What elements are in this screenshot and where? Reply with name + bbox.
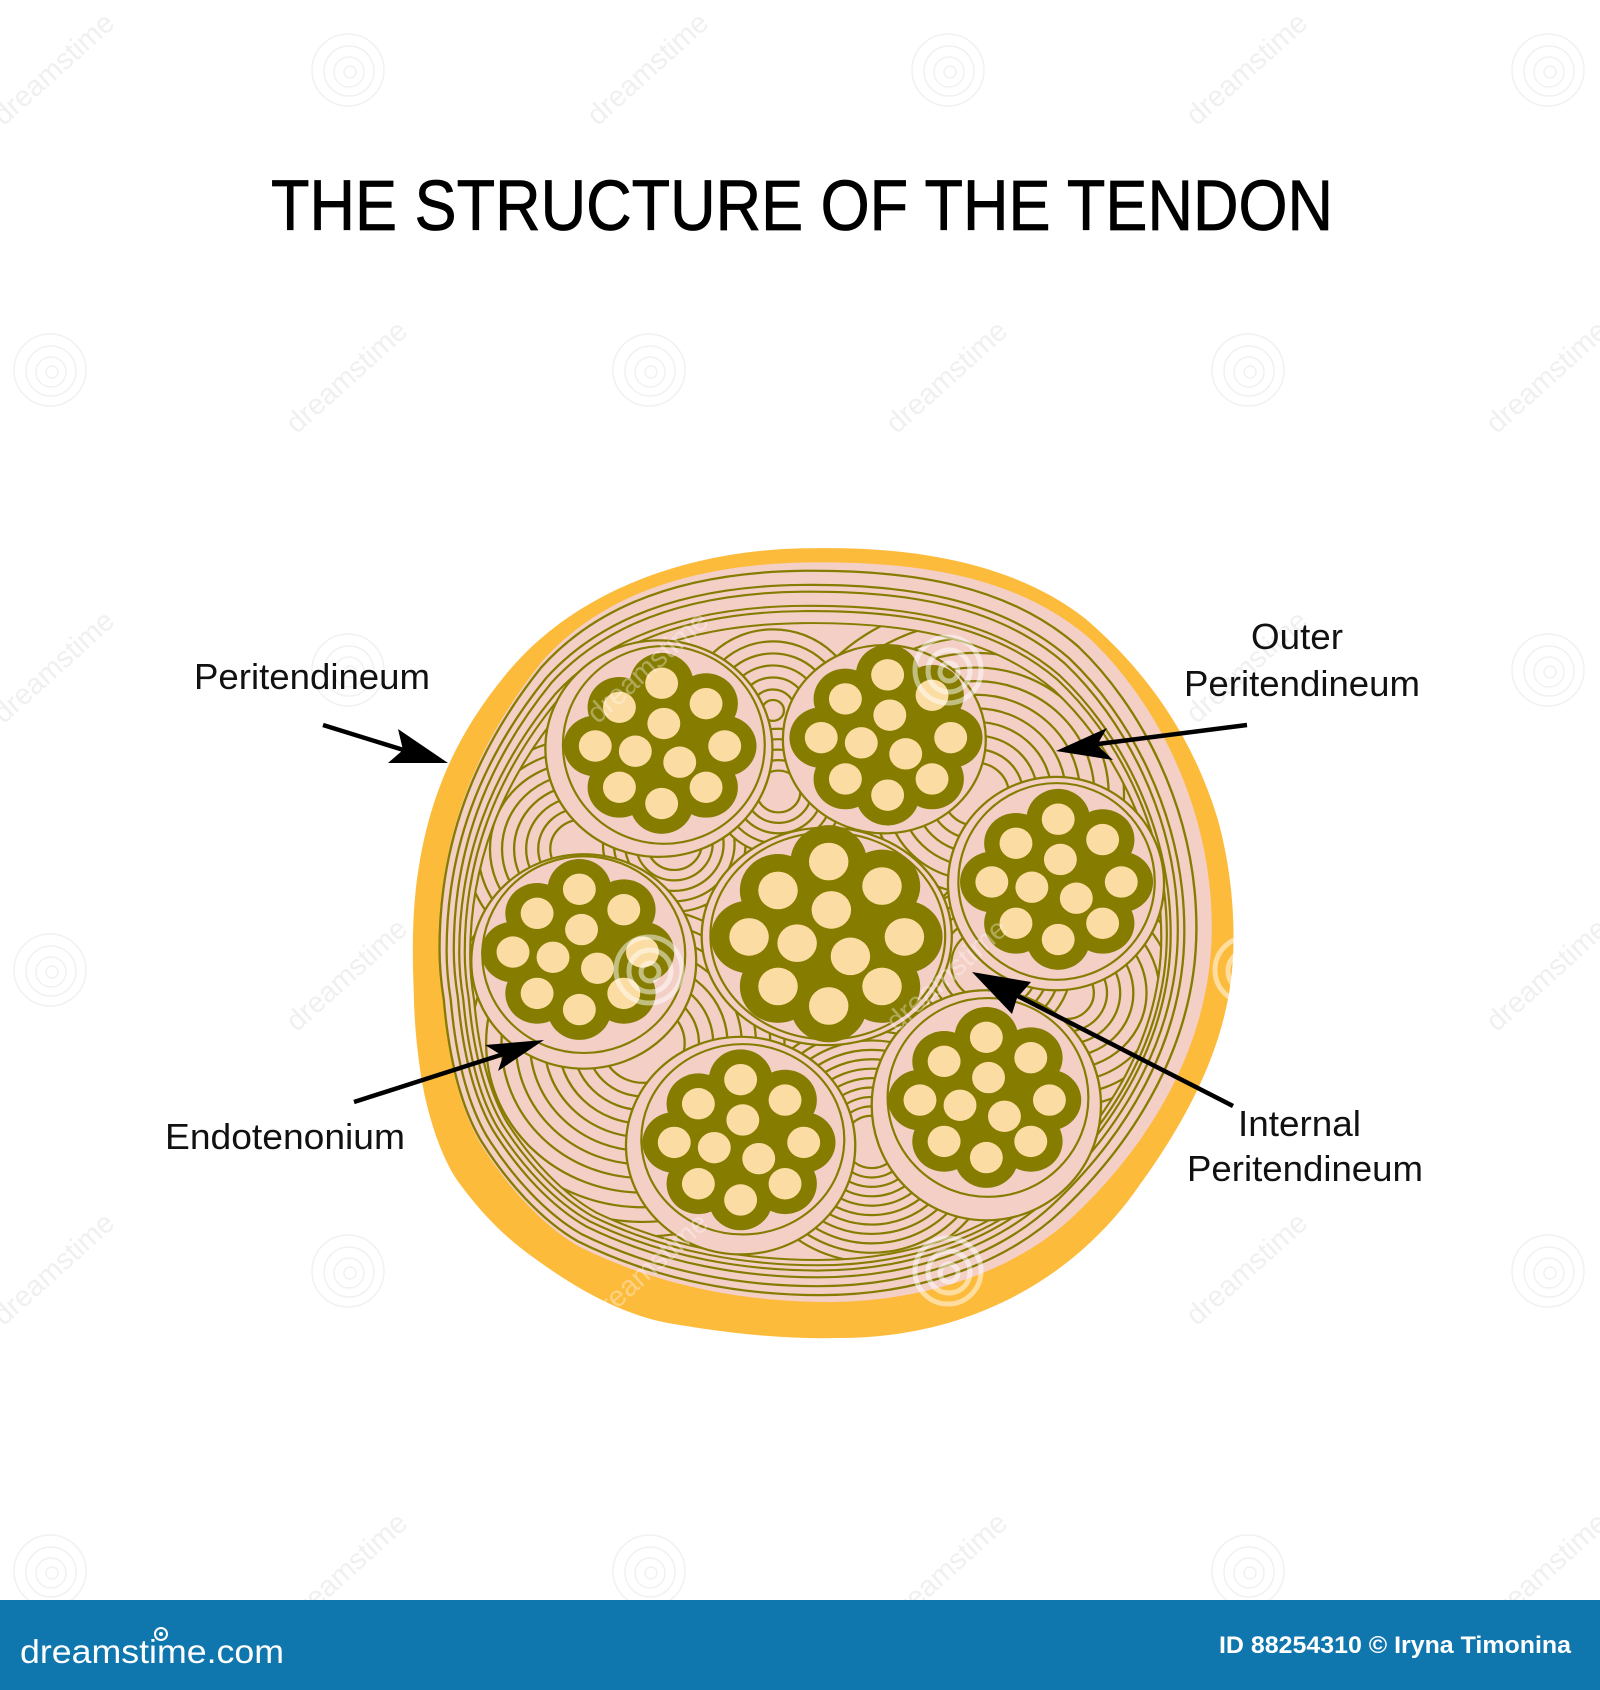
watermark pattern: dreamstime (1180, 7, 1314, 132)
watermark pattern: dreamstime (1180, 605, 1314, 730)
outer yellow sheath (413, 548, 1234, 1338)
fascicle: bottom right (872, 990, 1101, 1220)
watermark over tendon: dreamstime (581, 605, 715, 730)
label: Internal Peritendineum: Peritendineum (1187, 1148, 1423, 1189)
fascicle: bottom (626, 1037, 855, 1254)
watermark pattern: dreamstime (280, 1507, 414, 1632)
fascicle: right (948, 777, 1164, 990)
tendon cross-section (413, 548, 1234, 1338)
label: Internal Peritendineum: Internal (1238, 1103, 1361, 1144)
concentric outer fibre lines (439, 571, 1196, 1295)
footer credit: ID 88254310 © Iryna Timonina (1219, 1632, 1572, 1659)
watermark pattern: dreamstime (880, 315, 1014, 440)
watermark over tendon: dreamstime (880, 913, 1014, 1038)
fascicle: top left (545, 640, 772, 857)
fascicle: left (471, 854, 696, 1069)
fascicle: top middle (783, 645, 986, 833)
label: Outer Peritendineum (1184, 616, 1420, 704)
title: THE STRUCTURE OF THE TENDON (271, 167, 1333, 246)
label: Internal Peritendineum (1187, 1103, 1423, 1189)
curved fibre families between fascicles (472, 626, 1160, 1258)
label: Peritendineum: Peritendineum (194, 656, 430, 697)
label: Outer Peritendineum: Peritendineum (1184, 663, 1420, 704)
watermark over tendon (581, 605, 1281, 1332)
arrow: Endotenonium (354, 1040, 544, 1102)
watermark pattern: dreamstime (1180, 1207, 1314, 1332)
footer bar (0, 1600, 1600, 1690)
label: Outer Peritendineum: Outer (1251, 616, 1343, 657)
central fascicle (702, 825, 952, 1045)
footer logo: dreamstime.com (20, 1633, 284, 1670)
arrow: Peritendineum (323, 725, 448, 763)
watermark pattern: dreamstime (280, 913, 414, 1038)
arrow: Outer Peritendineum (1056, 725, 1247, 760)
label: Endotenonium: Endotenonium (165, 1116, 405, 1157)
watermark pattern: dreamstime (880, 1507, 1014, 1632)
watermark pattern: dreamstime (280, 315, 414, 440)
arrow: Internal Peritendineum (972, 972, 1233, 1106)
watermark pattern: dreamstime (581, 7, 715, 132)
watermark over tendon: dreamstime (581, 1207, 715, 1332)
pink tendon body (438, 562, 1212, 1302)
